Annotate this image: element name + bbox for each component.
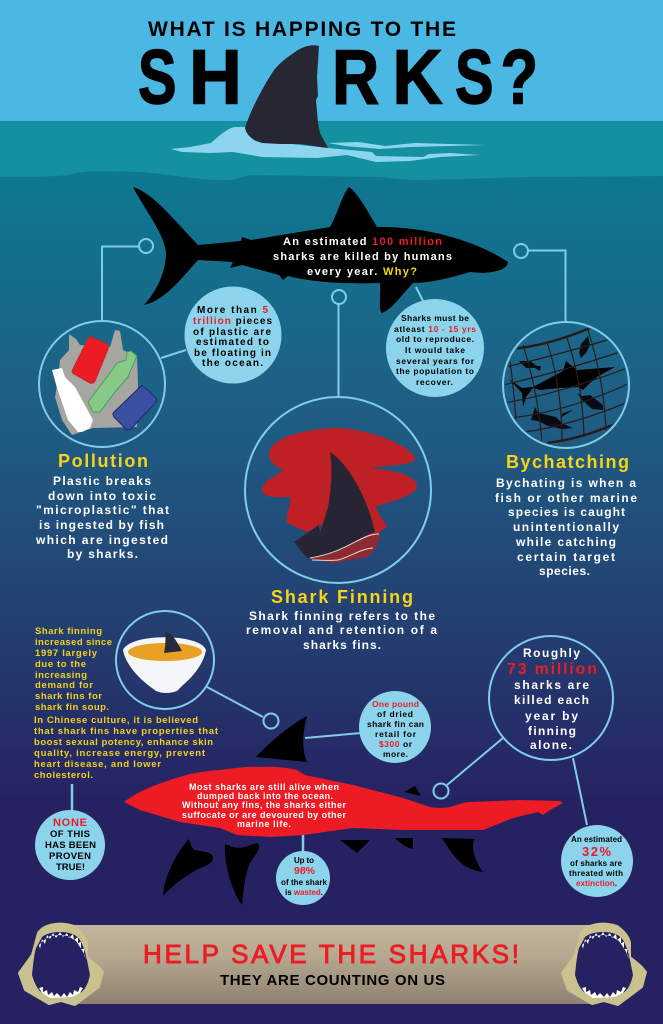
- text: alive when dumped: suffocate or are devoured by other: [182, 810, 346, 820]
- callout: five trillion pieces of plastic: More than 5: [197, 305, 268, 316]
- text: pollution description: is ingested by fish: [39, 518, 164, 532]
- text: chinese culture beliefs: heart disease, and lower: [34, 759, 161, 770]
- callout: 32 percent threatened: extinction.: [576, 879, 617, 888]
- connector: wasted bubble: [302, 835, 304, 852]
- text: pollution description: down into toxic: [48, 489, 156, 503]
- text: bychatching description: unintentionally: [513, 520, 619, 534]
- callout: none proven: PROVEN: [49, 851, 91, 862]
- callout: 98 percent wasted: of the shark: [281, 878, 328, 887]
- text: shark finning description: [246, 609, 437, 652]
- callout: five trillion pieces of plastic: estimated to: [196, 337, 269, 348]
- text: alive when dumped: [182, 782, 346, 829]
- callout: five trillion pieces of plastic: of plastic are: [193, 327, 271, 338]
- callout: 73 million: finning: [528, 724, 576, 738]
- text: bychatching description: Bychating is when a: [496, 476, 636, 490]
- callout: 73 million: year by: [525, 709, 578, 723]
- connector: dorsal fin to price bubble: [305, 733, 361, 738]
- icon: foam splash: [171, 127, 486, 162]
- text: pollution description: which are ingested: [35, 533, 168, 547]
- text: soup demand: shark fin soup.: [35, 702, 109, 713]
- text: soup demand: 1997 largely: [35, 648, 98, 659]
- banner: help save the sharks: [19, 924, 646, 1005]
- sea surface: [0, 121, 663, 181]
- text: pollution description: Plastic breaks: [53, 474, 151, 488]
- text: shark finning description: sharks fins.: [303, 638, 381, 652]
- connector: finning stat to shark: [447, 738, 503, 785]
- callout: reproduction age: recover.: [416, 377, 453, 387]
- callout: none proven: [35, 810, 105, 880]
- callout: one pound price: shark fin can: [367, 719, 424, 729]
- title: [138, 18, 538, 121]
- text: alive when dumped: dumped back into the ocean.: [197, 791, 333, 801]
- callout: five trillion pieces of plastic: the ocean.: [202, 358, 263, 369]
- text: bychatching description: species.: [539, 564, 590, 578]
- connector: bycatch: [528, 250, 566, 322]
- text: alive when dumped: marine life.: [237, 819, 291, 829]
- callout: one pound price: $300 or: [379, 739, 413, 749]
- marker: finning stat: [434, 784, 448, 798]
- text: bychatching description: fish or other marine: [495, 491, 637, 505]
- connector: finning: [338, 304, 340, 397]
- icon: right shark jaw: [562, 924, 646, 1005]
- connector: finning stat to extinction: [573, 758, 587, 825]
- callout: 98 percent wasted: 98%: [294, 865, 316, 877]
- connector: reproduction bubble: [416, 287, 423, 301]
- connector: plastic bubble: [161, 350, 186, 358]
- heading: bychatching: Bychatching: [506, 452, 629, 472]
- connector: soup to shark: [207, 687, 263, 717]
- callout: 73 million: 73 million: [507, 661, 597, 678]
- callout: 98 percent wasted: is wasted.: [285, 888, 323, 897]
- callout: reproduction age: old to reproduce.: [396, 334, 474, 344]
- text: soup demand: Shark finning: [35, 626, 102, 637]
- callout: none proven: HAS BEEN: [45, 840, 96, 851]
- callout: one pound price: of dried: [377, 709, 413, 719]
- text: shark finning description: Shark finning refers to the: [249, 609, 435, 623]
- callout: reproduction age: [386, 299, 484, 397]
- title word: sharks: [138, 34, 538, 121]
- callout: 73 million: alone.: [530, 738, 572, 752]
- title word: sharks: S: [138, 34, 177, 120]
- title line: what is happing: WHAT IS HAPPING TO THE: [148, 18, 456, 41]
- callout: reproduction age: It would take: [405, 345, 465, 355]
- text: soup demand: increasing: [35, 670, 87, 681]
- callout: reproduction age: Sharks must be: [401, 313, 469, 323]
- callout: 73 million: [489, 636, 613, 760]
- icon: shark fin soup bowl: [116, 611, 214, 709]
- callout: 98 percent wasted: Up to: [294, 856, 314, 865]
- callout: reproduction age: atleast 10 - 15 yrs: [394, 324, 476, 334]
- callout: none proven: OF THIS: [50, 829, 90, 840]
- title word: sharks: ?: [500, 34, 538, 120]
- callout: one pound price: [359, 691, 431, 763]
- callout: none proven: NONE: [53, 817, 87, 829]
- marker: bycatch: [514, 244, 528, 258]
- title word: sharks: K: [392, 34, 443, 120]
- text: chinese culture beliefs: boost sexual potency, enhance skin: [34, 737, 213, 748]
- marker: finning: [332, 290, 346, 304]
- shark statement text: [273, 236, 452, 278]
- top shark silhouette: [133, 187, 508, 313]
- text: chinese culture beliefs: quality, increase energy, prevent: [34, 748, 206, 759]
- text: bychatching description: [495, 476, 637, 578]
- text: alive when dumped: Without any fins, the sharks either: [182, 800, 346, 810]
- callout: one pound price: One pound: [372, 699, 419, 709]
- banner heading: HELP SAVE THE SHARKS!: [143, 939, 519, 969]
- text: chinese culture beliefs: In Chinese culture, it is believed: [34, 715, 198, 726]
- callout: one pound price: retail for: [375, 729, 417, 739]
- text: pollution description: "microplastic" that: [36, 503, 169, 517]
- callout: 32 percent threatened: 32%: [582, 844, 611, 859]
- heading: shark finning: Shark Finning: [271, 587, 413, 607]
- shark statement text: every year. Why?: [307, 266, 417, 278]
- callout: 98 percent wasted: [276, 851, 330, 905]
- shark statement text: sharks are killed by humans: [273, 251, 452, 263]
- callout: five trillion pieces of plastic: be floating in: [194, 348, 271, 359]
- bottom shark body in red: [124, 767, 563, 837]
- text: soup demand: demand for: [35, 680, 93, 691]
- callout: one pound price: more.: [383, 749, 408, 759]
- callout: five trillion pieces of plastic: trillion pieces: [193, 316, 272, 327]
- title word: sharks: R: [332, 35, 379, 121]
- icon: plastic in circle: [39, 321, 165, 447]
- connector: none bubble: [71, 784, 73, 811]
- text: soup demand: shark fins for: [35, 691, 102, 702]
- callout: 73 million: killed each: [514, 693, 589, 707]
- panel: bychatching: [495, 322, 637, 578]
- callout: 73 million: sharks are: [514, 678, 589, 692]
- text: pollution description: by sharks.: [67, 547, 138, 561]
- marker: pollution: [139, 239, 153, 253]
- bottom shark fins: [163, 716, 483, 905]
- icon: left shark jaw: [19, 924, 103, 1005]
- text: soup demand: [35, 626, 112, 713]
- callout: none proven: TRUE!: [56, 862, 85, 873]
- marker: soup: [264, 714, 278, 728]
- callout: reproduction age: several years for: [396, 356, 475, 366]
- callout: 32 percent threatened: [561, 825, 633, 897]
- text: bychatching description: certain target: [517, 550, 615, 564]
- icon: sharks caught in net: [503, 322, 630, 448]
- title word: sharks: H: [189, 34, 242, 120]
- text: bychatching description: species is caught: [508, 505, 625, 519]
- panel: pollution: [35, 321, 169, 561]
- callout: five trillion pieces of plastic: [184, 286, 282, 384]
- text: chinese culture beliefs: that shark fins have properties that: [34, 726, 219, 737]
- heading: pollution: Pollution: [58, 451, 148, 471]
- text: chinese culture beliefs: [34, 715, 219, 781]
- callout: 32 percent threatened: of sharks are: [570, 859, 623, 868]
- callout: 32 percent threatened: An estimated: [571, 835, 622, 844]
- text: soup demand: due to the: [35, 659, 86, 670]
- text: pollution description: [35, 474, 169, 561]
- text: shark finning description: removal and retention of a: [246, 623, 437, 637]
- shark statement text: An estimated 100 million: [283, 236, 442, 248]
- callout: reproduction age: the population to: [396, 366, 474, 376]
- callout: 32 percent threatened: threated with: [569, 869, 623, 878]
- title word: sharks: S: [455, 34, 494, 120]
- text: alive when dumped: Most sharks are still alive when: [189, 782, 339, 792]
- icon: dorsal fin above water: [245, 45, 328, 148]
- callout: 73 million: Roughly: [523, 646, 580, 660]
- text: soup demand: increased since: [35, 637, 112, 648]
- text: bychatching description: while catching: [515, 535, 616, 549]
- banner subheading: THEY ARE COUNTING ON US: [220, 972, 445, 989]
- sky background: [0, 0, 663, 122]
- panel: shark finning: [245, 397, 437, 652]
- icon: severed fin with blood: [245, 397, 431, 583]
- connector: pollution: [102, 246, 139, 321]
- text: chinese culture beliefs: cholesterol.: [34, 770, 93, 781]
